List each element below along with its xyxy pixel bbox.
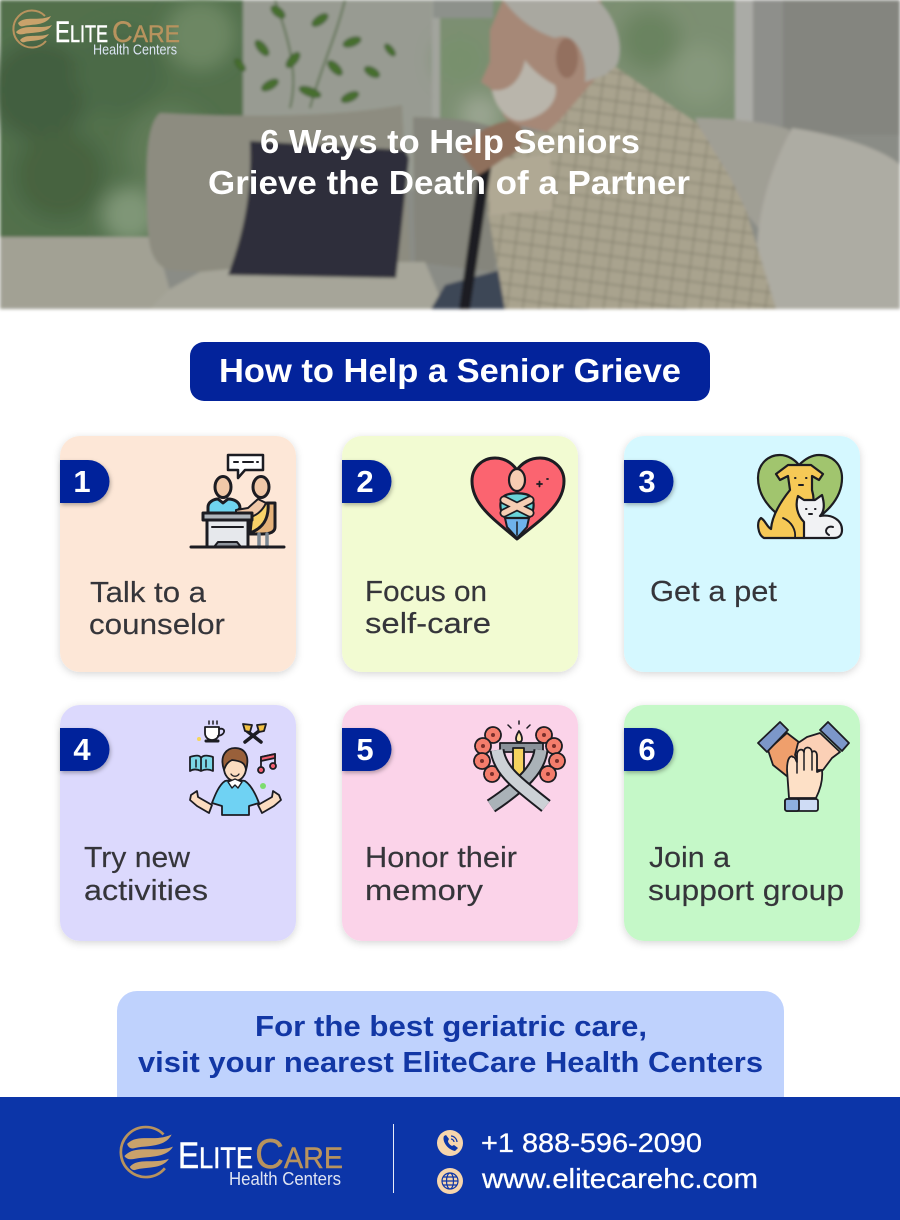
panel: card 6 join a support group [624,705,860,941]
badge 6 [624,728,674,771]
logo: EliteCare top left: CARE [112,16,180,49]
text: talk to a counselor: Talk to a [90,577,206,609]
text: talk to a counselor [89,577,226,641]
icon: globe [437,1168,463,1194]
text: get a pet: Get a pet [650,576,777,608]
text: join a support group: Join a [649,842,730,874]
badge 3: 3 [638,464,656,499]
icon: stacked hands [758,722,849,811]
panel: card 3 get a pet [624,436,860,672]
icon: dog and cat with heart [758,455,842,538]
heading pill [190,342,710,401]
text: join a support group [648,842,844,907]
sofa [0,237,175,309]
logo: EliteCare footer: CARE [255,1130,343,1177]
head [481,0,609,132]
pillow [228,141,409,278]
badge 5 [342,728,392,771]
callout: best geriatric care: visit your nearest EliteCare Health Centers [138,1047,763,1079]
icon: counselor conversation [191,455,284,547]
badge 4 [60,728,110,771]
panel: card 5 honor their memory [342,705,578,941]
text: phone number: +1 888-596-2090 [481,1128,702,1158]
icon: memorial wreath ribbon and candle [474,721,565,806]
plant [233,0,397,108]
text: try new activities: activities [84,875,208,907]
badge 1: 1 [73,464,91,499]
text: join a support group: support group [648,875,844,907]
badge 3 [624,460,674,503]
panel: hero photo of senior man on sofa [0,0,900,309]
icon: person with activities [190,721,281,815]
icon: phone [437,1130,463,1156]
text: focus on self-care: Focus on [365,576,487,608]
badge 2 [342,460,392,503]
logo: EliteCare top left [13,11,180,59]
panel: footer [0,1097,900,1220]
cane [459,160,492,309]
logo: EliteCare footer [121,1127,343,1189]
panel: card 4 try new activities [60,705,296,941]
text: honor their memory [365,842,518,907]
badge 6: 6 [638,732,656,767]
badge 1 [60,460,110,503]
badge 2: 2 [356,464,374,499]
callout: best geriatric care [117,991,784,1097]
hand [460,120,523,175]
heading pill: How to Help a Senior Grieve [219,353,681,390]
badge 4: 4 [73,732,91,767]
text: website: www.elitecarehc.com [481,1163,758,1194]
panel: card 1 talk to a counselor [60,436,296,672]
title [208,124,690,202]
badge 5: 5 [356,732,374,767]
logo: EliteCare top left: Health Centers [93,42,177,58]
logo: EliteCare footer: Health Centers [229,1169,341,1189]
title: 6 Ways to Help Seniors [260,124,640,161]
jeans [431,270,510,309]
logo: EliteCare top left: ELITE [55,16,108,49]
icon: heart with self-hugging person [472,458,564,539]
logo: EliteCare footer: ELITE [178,1135,253,1176]
panel: card 2 focus on self-care [342,436,578,672]
text: focus on self-care: self-care [365,608,491,640]
text: talk to a counselor: counselor [89,609,226,641]
text: try new activities: Try new [84,842,190,874]
text: focus on self-care [365,576,491,640]
text: try new activities [84,842,208,907]
callout: best geriatric care: For the best geriatric care, [255,1011,647,1043]
text: honor their memory: Honor their [365,842,518,874]
title: Grieve the Death of a Partner [208,165,690,202]
text: honor their memory: memory [365,875,484,907]
shirt [487,63,776,309]
